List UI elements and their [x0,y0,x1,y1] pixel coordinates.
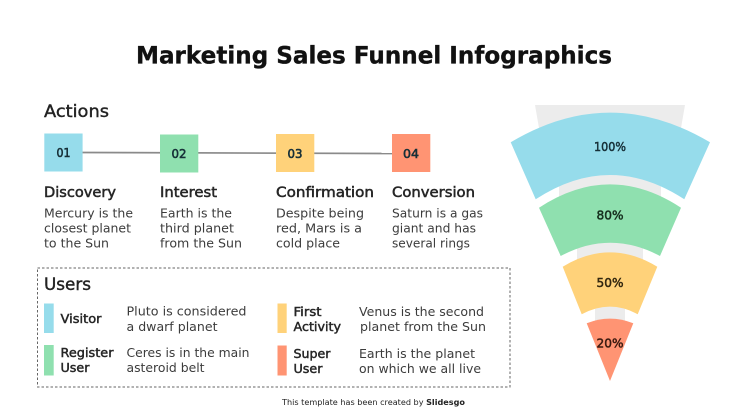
segment 20%: 20% [596,336,624,350]
user: first activity: Venus is the second [359,304,484,319]
step 02: third planet [160,220,234,236]
user: register user: asteroid belt [126,360,205,375]
actions heading: Actions [44,102,109,122]
user: first activity: Activity [294,320,341,334]
user: visitor: Pluto is considered [126,304,246,318]
step 03: Confirmation [276,185,374,201]
panel: users [38,268,510,387]
user: register user [44,345,250,376]
step 04: Conversion [392,185,475,201]
user: visitor [44,304,246,334]
step 02: Earth is the [160,206,232,220]
user: visitor: Visitor [60,312,102,326]
funnel chart [511,105,710,381]
footer credit: This template has been created by Slidesgo [281,398,466,407]
user: first activity [278,304,486,334]
funnel backing [535,105,685,325]
step 01 [44,134,133,250]
step 02: Interest [160,185,218,201]
step 04: 04 [403,146,419,161]
step 01: 01 [56,145,70,160]
segment 50%: 50% [596,275,624,290]
segment 50% [563,252,657,314]
user: super user: User [294,362,323,376]
user: super user [278,346,481,376]
step 02 [160,134,242,250]
step 01: Mercury is the [44,206,133,220]
panel: actions [44,102,483,250]
step 04 [392,134,483,250]
title: Marketing Sales Funnel Infographics [136,42,612,70]
step 04: giant and has [392,220,476,236]
step 02: 02 [172,146,186,161]
step 02: from the Sun [160,236,242,250]
step 03 [276,134,374,250]
step 03: 03 [288,146,302,161]
segment 100%: 100% [594,139,626,154]
step 03: Despite being [276,206,364,220]
segment 80% [539,184,681,256]
user: first activity: First [294,305,322,319]
user: register user: Ceres is in the main [126,345,250,360]
step 01: closest planet [44,220,131,236]
step 01: to the Sun [44,236,109,250]
step 03: cold place [276,236,340,250]
timeline connector [82,152,392,154]
step 01: Discovery [44,185,116,201]
segment 80%: 80% [596,208,624,222]
step 04: Saturn is a gas [392,206,483,220]
user: super user: Earth is the planet [359,346,475,361]
user: super user: on which we all live [359,361,481,376]
segment 20% [587,319,633,381]
users heading: Users [44,275,91,295]
segment 100% [511,113,710,199]
step 04: several rings [392,236,470,250]
user: visitor: a dwarf planet [126,319,218,334]
user: register user: User [60,361,90,375]
user: first activity: planet from the Sun [360,319,486,334]
user: super user: Super [294,347,331,361]
step 03: red, Mars is a [276,220,362,236]
user: register user: Register [60,346,114,360]
dashed frame [38,268,510,387]
